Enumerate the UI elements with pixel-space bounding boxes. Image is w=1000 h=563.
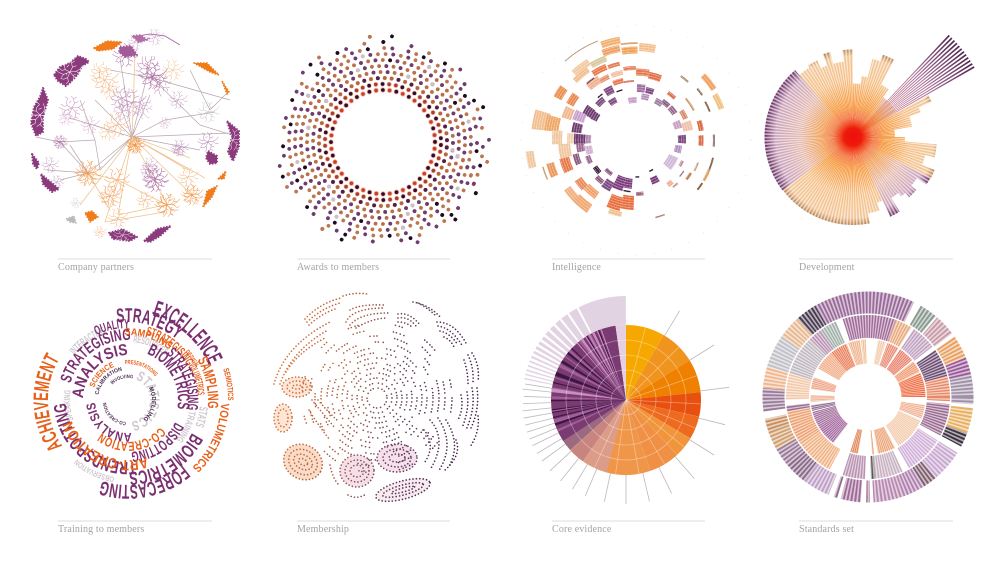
- caption: standards set: Standards set: [799, 524, 854, 535]
- panel: development: [754, 38, 953, 273]
- dot rings: awards to members: [239, 0, 527, 286]
- caption: company partners: Company partners: [58, 262, 134, 273]
- circular word cloud: training to members: ART-CREATION: [62, 421, 146, 470]
- circular word cloud: training to members: ANALYSIS: [86, 403, 132, 442]
- circular word cloud: training to members: SAMPLING: [198, 356, 218, 408]
- panel: company partners: [24, 29, 244, 273]
- circular word cloud: training to members: FORECASTING: [100, 466, 190, 499]
- circular word cloud: training to members: [34, 300, 234, 499]
- circular word cloud: training to members: VOLUMETRICS: [189, 362, 205, 395]
- radial bar rings: standards set: [762, 292, 974, 502]
- circular word cloud: training to members: INVOLVING: [110, 374, 133, 384]
- circular word cloud: training to members: ANALYSIS: [72, 344, 128, 398]
- circular word cloud: training to members: MODELLING: [144, 386, 156, 422]
- caption: core evidence: Core evidence: [552, 524, 612, 535]
- circular word cloud: training to members: SCIENCE: [90, 362, 114, 387]
- caption: development: Development: [799, 262, 855, 273]
- circular word cloud: training to members: STATISTICS: [132, 372, 160, 431]
- circular word cloud: training to members: SPEAKING: [64, 390, 73, 422]
- circular word cloud: training to members: SEMIOTICS: [224, 368, 234, 400]
- circular word cloud: training to members: SAMPLING: [124, 328, 172, 348]
- circular word cloud: training to members: PRESENTATIONS: [124, 360, 158, 376]
- caption: intelligence: Intelligence: [552, 262, 601, 273]
- caption: awards to members: Awards to members: [297, 262, 379, 273]
- radial burst chart: development: [754, 38, 952, 236]
- circular word cloud: training to members: INTERACTIVE: [69, 327, 104, 354]
- panel: training to members: [34, 300, 234, 535]
- circular word cloud: training to members: TRAINING: [176, 412, 196, 442]
- circular word cloud: training to members: STRATEGISING: [60, 329, 130, 382]
- sunburst pie chart: core evidence: [520, 294, 732, 506]
- circular word cloud: training to members: VOLUMETRICS: [193, 404, 230, 472]
- circular word cloud: training to members: CO-CREATION: [97, 428, 166, 451]
- panel: membership: [274, 293, 478, 535]
- circular word cloud: training to members: ACHIEVEMENT: [34, 352, 62, 451]
- circular word cloud: training to members: CO-CREATION: [102, 402, 126, 426]
- circular word cloud: training to members: QUALITY: [94, 319, 128, 336]
- circular word cloud: training to members: EXCELLENCE: [152, 300, 223, 364]
- circular word cloud: training to members: CALIBRATION: [95, 367, 122, 394]
- circular word cloud: training to members: OBSERVATION: [74, 460, 114, 482]
- circular word cloud: training to members: STRATEGISING: [168, 348, 198, 410]
- panel: intelligence: [486, 0, 786, 290]
- dot cluster chart: membership: [274, 293, 478, 506]
- pie sectors: [573, 347, 679, 453]
- circular word cloud: training to members: STATS: [196, 406, 208, 428]
- circular word cloud: training to members: STRATEGY: [116, 308, 185, 338]
- circular word cloud: training to members: DESIGN: [186, 349, 199, 366]
- panel: core evidence: [520, 294, 732, 535]
- outer pale fan: [520, 294, 732, 506]
- panel: awards to members: [239, 0, 527, 286]
- circular word cloud: training to members: DISPOTTING: [132, 422, 184, 462]
- circular word cloud: training to members: RESOURCES: [133, 336, 168, 355]
- circular word cloud: training to members: STRATEGISING: [146, 326, 194, 366]
- panel: standards set: [762, 292, 974, 532]
- circular word cloud: training to members: BIOMETRICS: [147, 343, 190, 410]
- network chart: company partners: [24, 29, 244, 244]
- circular word cloud: training to members: TRENDSPOTTING: [54, 404, 136, 474]
- caption: training to members: Training to members: [58, 524, 144, 535]
- circular word cloud: training to members: BIOMETRICS: [130, 433, 203, 485]
- segmented arc chart: intelligence: [486, 0, 786, 290]
- caption: membership: Membership: [297, 524, 349, 535]
